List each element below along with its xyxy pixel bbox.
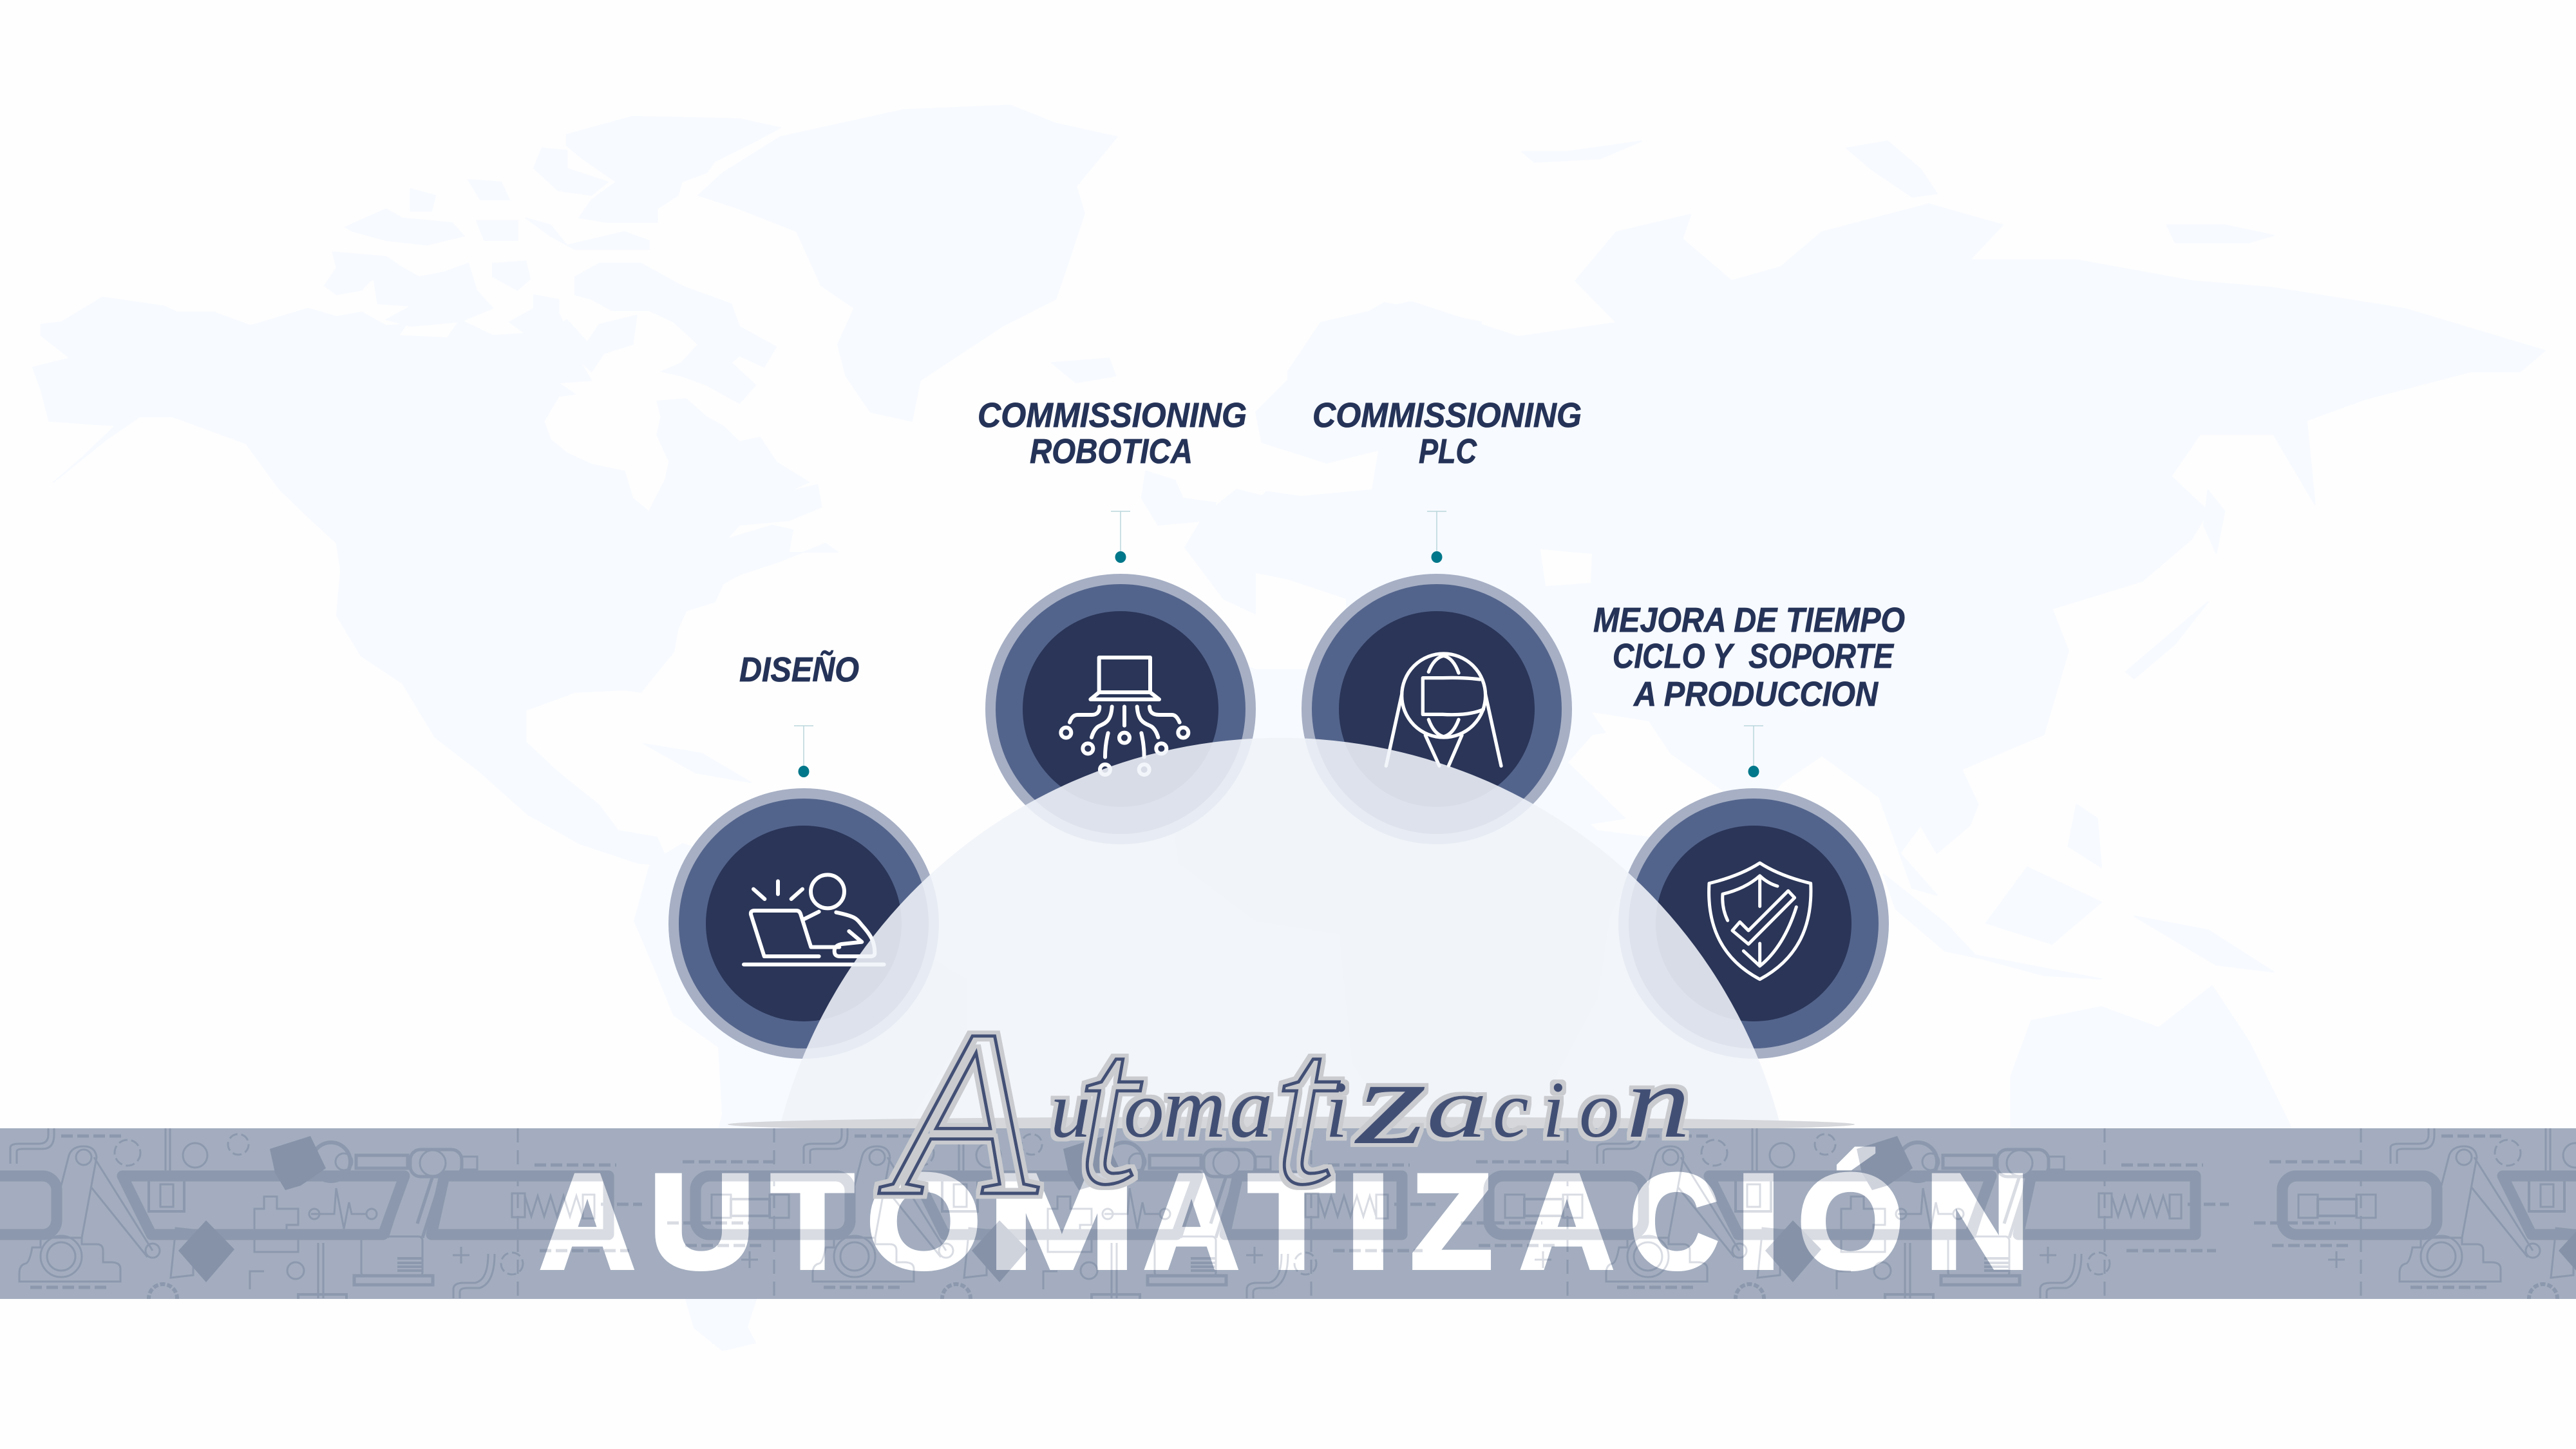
script title: i xyxy=(1542,1066,1565,1155)
connector: mejora xyxy=(1744,726,1763,777)
label: commissioning plc: COMMISSIONING xyxy=(1312,396,1582,435)
script title: i xyxy=(1325,1066,1348,1155)
circle: robotica xyxy=(985,574,1256,844)
title: automatización: I xyxy=(1736,1147,1781,1296)
dome xyxy=(764,738,1797,1299)
label: commissioning plc xyxy=(1312,396,1582,471)
icon: laptop with circuits xyxy=(1061,658,1188,775)
script title: u xyxy=(1050,1066,1091,1155)
title: automatización: U xyxy=(649,1147,755,1296)
label: mejora de tiempo: MEJORA DE TIEMPO xyxy=(1593,601,1905,639)
title: automatización: Ó xyxy=(1798,1147,1903,1296)
title: automatización: A xyxy=(1144,1147,1238,1296)
infographic canvas xyxy=(0,402,2576,1299)
label: mejora de tiempo: CICLO Y SOPORTE xyxy=(1613,637,1895,676)
step: commissioning plc xyxy=(1302,396,1582,844)
icon: globe with visor xyxy=(1386,654,1501,766)
band xyxy=(0,1128,2576,1299)
connector: diseño xyxy=(794,726,813,777)
script title: z xyxy=(1354,1035,1427,1170)
band machinery pattern xyxy=(0,1128,2576,1312)
circle: diseño xyxy=(668,788,939,1059)
script title: c xyxy=(1493,1066,1528,1155)
script title: t xyxy=(1077,987,1145,1230)
label: mejora de tiempo: A PRODUCCION xyxy=(1633,675,1879,714)
script title: a xyxy=(1426,1060,1488,1156)
label: commissioning robotica: ROBOTICA xyxy=(1030,432,1193,471)
title: automatización: A xyxy=(1520,1147,1613,1296)
icon: person at laptop xyxy=(744,875,884,965)
title: automatización: M xyxy=(988,1147,1135,1296)
circle: plc xyxy=(1302,574,1572,844)
script title: n xyxy=(1626,1045,1690,1159)
label: mejora de tiempo xyxy=(1593,601,1905,714)
script title: o xyxy=(1579,1066,1619,1155)
label: diseño: DISEÑO xyxy=(739,650,859,689)
title: automatización: A xyxy=(540,1147,634,1296)
step: commissioning robotica xyxy=(978,396,1256,844)
script title: m xyxy=(1163,1060,1226,1156)
script title: A xyxy=(877,981,1041,1245)
circle: mejora xyxy=(1618,788,1889,1059)
title: automatización: N xyxy=(1925,1147,2030,1296)
connector: plc xyxy=(1427,511,1446,563)
title: automatización: T xyxy=(1249,1147,1334,1296)
connector: robotica xyxy=(1111,511,1130,563)
title: automatización: I xyxy=(1345,1147,1391,1296)
map seas xyxy=(1256,441,1687,779)
step: diseño xyxy=(668,650,939,1059)
dome shadow xyxy=(728,1117,1855,1132)
step: mejora de tiempo xyxy=(1593,601,1905,1059)
title: automatización: O xyxy=(867,1147,981,1296)
label: commissioning plc: PLC xyxy=(1419,432,1477,471)
icon: shield with check xyxy=(1709,863,1811,980)
title: automatización: Z xyxy=(1411,1147,1492,1296)
script title: t xyxy=(1274,987,1342,1230)
script title: a xyxy=(1229,1060,1273,1156)
label: commissioning robotica: COMMISSIONING xyxy=(978,396,1247,435)
label: commissioning robotica xyxy=(978,396,1247,471)
script title: o xyxy=(1124,1066,1164,1155)
title: automatización: C xyxy=(1630,1147,1718,1296)
title: automatización: T xyxy=(772,1147,853,1296)
